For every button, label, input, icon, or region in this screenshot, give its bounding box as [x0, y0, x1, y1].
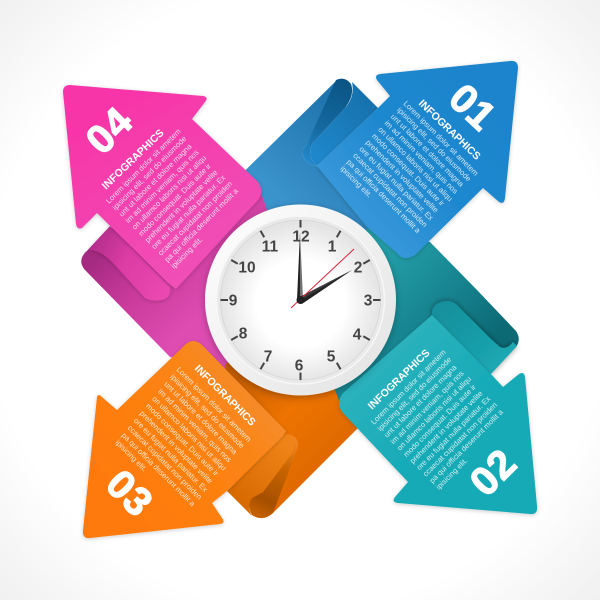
clock numerals: 6: [295, 358, 304, 374]
text block 03: im ad minim veniam, quis nos: [156, 387, 234, 464]
text block 01: [339, 99, 480, 235]
scroll fold: orange: [227, 434, 294, 516]
band: orange ribbon: [225, 300, 358, 518]
clock inner rim: [216, 216, 384, 384]
clock: [205, 204, 396, 396]
clock numerals: 1: [328, 238, 337, 256]
text block 02: unt ut labore et dolore magna: [382, 362, 459, 439]
clock numerals: 2: [354, 260, 362, 276]
text block 01: ccaecat cupidatat non proiden: [351, 151, 429, 229]
text block 02: pa qui officia deserunt mollit a: [428, 407, 505, 485]
text block 04: prehenderit in voluptate velite: [143, 168, 220, 244]
number 03: 03: [97, 462, 161, 526]
clock numerals: 8: [239, 326, 248, 342]
clock numerals: 7: [264, 348, 272, 366]
text block 01: unt ut labore et dolore magna: [389, 112, 466, 189]
text block 03: [114, 365, 253, 509]
text block 01: ipisicing elit.: [339, 164, 374, 199]
scroll fold: pink: [84, 226, 170, 301]
arrow shape: orange: [83, 341, 286, 538]
scroll opening: orange: [249, 434, 298, 518]
panel: 04 pink arrow: [63, 85, 261, 301]
clock face: [220, 220, 380, 380]
text block 01: ore eu fugiat nulla pariatur. Ex: [357, 145, 435, 222]
text block 01: modo consequat. Duis aute ir: [370, 132, 447, 208]
text block 03: modo consequat. Duis aute ir: [144, 402, 221, 478]
text block 02: prehenderit in voluptate velite: [408, 389, 485, 465]
clock hands: [291, 232, 354, 308]
text block 02: on ullamco laboris nisi ut aliqu: [395, 374, 473, 452]
heading: infographics 02: INFOGRAPHICS: [366, 347, 433, 412]
panel: 03 orange arrow: [83, 341, 298, 538]
arrow shape: pink: [63, 85, 261, 289]
clock numerals: 3: [364, 292, 373, 310]
text block 03: ipisicing elit, sed do eiusmode: [168, 372, 246, 450]
text block 04: unt ut labore et dolore magna: [117, 141, 194, 218]
band: blue ribbon: [200, 79, 403, 300]
number 04: 04: [78, 99, 142, 163]
text block 03: unt ut labore et dolore magna: [162, 380, 239, 457]
text block 02: modo consequat. Duis aute ir: [402, 382, 478, 459]
text block 03: ccaecat cupidatat non proiden: [126, 423, 204, 501]
text block 02: ipisicing elit.: [434, 456, 469, 491]
heading: infographics 01: INFOGRAPHICS: [416, 98, 483, 163]
panel: 01 blue arrow: [302, 61, 518, 258]
clock numerals: 9: [229, 292, 238, 310]
text block 04: Lorem ipsum dolor sit ametem: [104, 127, 183, 205]
scroll fold: teal: [432, 301, 517, 374]
scroll fold: blue: [310, 82, 378, 166]
text block 01: prehenderit in voluptate velite: [364, 138, 440, 215]
arrow shape: teal: [339, 315, 537, 514]
heading: infographics 03: INFOGRAPHICS: [192, 363, 258, 429]
text block 03: on ullamco laboris nisi ut aliqu: [150, 394, 228, 472]
text block 02: Lorem ipsum dolor sit ametem: [369, 348, 448, 426]
text block 03: ipisicing elit.: [114, 438, 149, 473]
text block 02: ccaecat cupidatat non proiden: [421, 400, 499, 478]
clock numerals: 5: [327, 348, 336, 366]
text block 04: [104, 127, 240, 270]
clock numerals: [229, 228, 373, 374]
text block 02: im ad minim veniam, quis nos: [389, 369, 466, 446]
text block 03: ore eu fugiat nulla pariatur. Ex: [132, 416, 210, 494]
text block 04: ipisicing elit, sed do eiusmode: [111, 134, 188, 212]
clock numerals: 11: [262, 238, 279, 256]
text block 04: ipisicing elit.: [169, 235, 204, 270]
text block 01: Lorem ipsum dolor sit ametem: [402, 99, 480, 178]
text block 01: on ullamco laboris nisi ut aliqu: [376, 125, 454, 203]
clock case: [205, 204, 396, 396]
band: teal ribbon: [300, 228, 519, 403]
panel: 02 teal arrow: [339, 301, 537, 514]
scroll opening: blue: [302, 79, 352, 166]
clock ticks: [220, 220, 380, 380]
band: pink ribbon: [81, 193, 300, 371]
arrow shape: blue: [317, 61, 518, 258]
text block 03: pa qui officia deserunt mollit a: [120, 431, 198, 509]
text block 01: ipisicing elit, sed do eiusmode: [395, 106, 473, 183]
text block 04: ccaecat cupidatat non proiden: [156, 179, 234, 257]
text block 03: prehenderit in voluptate velite: [138, 409, 215, 485]
clock numerals: 10: [238, 260, 256, 276]
clock numerals: 4: [353, 326, 362, 344]
clock numerals: 12: [292, 228, 310, 246]
text block 03: Lorem ipsum dolor sit ametem: [175, 365, 253, 444]
number 01: 01: [440, 76, 504, 140]
heading: infographics 04: INFOGRAPHICS: [100, 127, 167, 192]
text block 04: modo consequat. Duis aute ir: [137, 161, 213, 238]
text block 01: pa qui officia deserunt mollit a: [345, 158, 423, 235]
text block 02: [369, 348, 505, 491]
text block 04: im ad minim veniam, quis nos: [124, 148, 201, 225]
text block 04: on ullamco laboris nisi ut aliqu: [130, 153, 208, 231]
text block 02: ore eu fugiat nulla pariatur. Ex: [415, 394, 492, 472]
number 02: 02: [462, 441, 526, 505]
text block 02: ipisicing elit, sed do eiusmode: [376, 355, 453, 433]
text block 04: ore eu fugiat nulla pariatur. Ex: [150, 173, 227, 251]
text block 04: pa qui officia deserunt mollit a: [163, 186, 240, 264]
text block 01: im ad minim veniam, quis nos: [383, 119, 460, 196]
